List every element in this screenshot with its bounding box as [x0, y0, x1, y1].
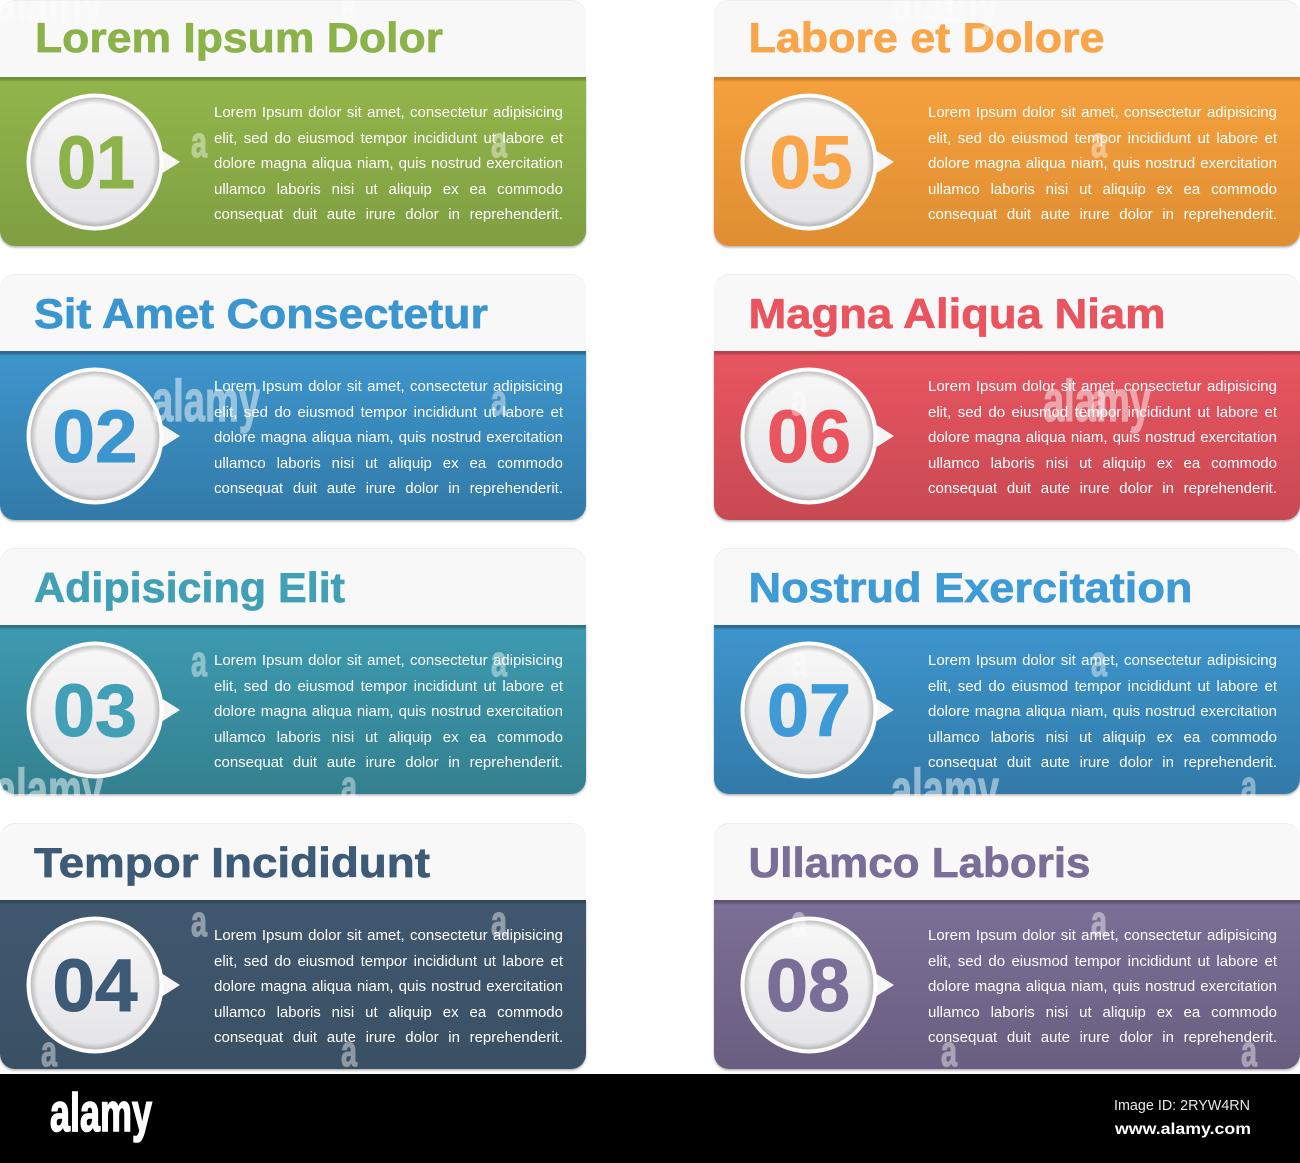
footer bar: [0, 1074, 1300, 1163]
text block: [928, 927, 1277, 1046]
band: orange body: [714, 77, 1300, 246]
text block: Lorem Ipsum dolor sit amet, consectetur adipisicing: [214, 927, 563, 944]
text block: elit, sed do eiusmod tempor incididunt ut labore et: [214, 404, 563, 420]
text block: elit, sed do eiusmod tempor incididunt ut labore et: [214, 952, 563, 970]
text block: ullamco laboris nisi ut aliquip ex ea commodo: [214, 1004, 563, 1020]
heading: Magna Aliqua Niam: [714, 274, 1300, 351]
text block: consequat duit aute irure dolor in reprehenderit.: [214, 206, 563, 223]
band: red body: [714, 351, 1300, 520]
heading: Ullamco Laboris: Ullamco Laboris: [748, 839, 1090, 886]
text block: Lorem Ipsum dolor sit amet, consectetur adipisicing: [214, 104, 563, 121]
text block: [928, 652, 1277, 771]
text block: consequat duit aute irure dolor in reprehenderit.: [214, 754, 563, 771]
badge: number 07: [740, 642, 894, 778]
text block: [214, 104, 563, 223]
text block: consequat duit aute irure dolor in reprehenderit.: [928, 754, 1277, 771]
text block: elit, sed do eiusmod tempor incididunt ut labore et: [928, 678, 1277, 694]
heading: Tempor Incididunt: Tempor Incididunt: [34, 839, 430, 886]
badge: number 05: [740, 94, 894, 230]
band: blue body: [0, 351, 586, 520]
watermarks overlay: a: [791, 376, 807, 425]
text block: ullamco laboris nisi ut aliquip ex ea commodo: [928, 454, 1277, 472]
text block: ullamco laboris nisi ut aliquip ex ea commodo: [928, 728, 1277, 746]
badge: number 07: 07: [767, 669, 851, 752]
text block: dolore magna aliqua niam, quis nostrud exercitation: [214, 429, 563, 446]
text block: dolore magna aliqua niam, quis nostrud exercitation: [928, 155, 1277, 172]
panel: card 04: [0, 823, 588, 1072]
heading: Labore et Dolore: Labore et Dolore: [748, 14, 1104, 61]
band: navy body: [0, 900, 586, 1069]
watermarks overlay: alamy: [152, 369, 260, 434]
band: purple body: [714, 900, 1300, 1069]
text block: elit, sed do eiusmod tempor incididunt ut labore et: [214, 130, 563, 146]
badge: number 01: [26, 94, 180, 230]
text block: ullamco laboris nisi ut aliquip ex ea commodo: [928, 180, 1277, 198]
watermarks overlay: a: [191, 637, 207, 686]
text block: dolore magna aliqua niam, quis nostrud exercitation: [214, 978, 563, 995]
heading: Sit Amet Consectetur: Sit Amet Consectetur: [34, 290, 488, 337]
panel: card 03: [0, 548, 588, 797]
panel: card 07: [712, 548, 1300, 797]
watermarks overlay: a: [491, 376, 507, 425]
watermarks overlay: a: [191, 897, 207, 946]
logo: alamy: alamy: [50, 1083, 152, 1143]
text block: ullamco laboris nisi ut aliquip ex ea commodo: [214, 180, 563, 198]
badge: number 04: [26, 916, 180, 1054]
heading: Sit Amet Consectetur: [0, 274, 586, 351]
badge: number 01: 01: [57, 121, 135, 204]
watermarks overlay: a: [1091, 637, 1107, 686]
watermarks overlay: a: [791, 637, 807, 686]
text block: dolore magna aliqua niam, quis nostrud exercitation: [928, 703, 1277, 720]
image id: Image ID: 2RYW4RN: [1114, 1097, 1250, 1114]
text block: elit, sed do eiusmod tempor incididunt ut labore et: [928, 130, 1277, 146]
text block: dolore magna aliqua niam, quis nostrud exercitation: [928, 978, 1277, 995]
badge: number 02: 02: [52, 395, 138, 478]
panel: card 01: [0, 0, 588, 249]
text block: dolore magna aliqua niam, quis nostrud exercitation: [928, 429, 1277, 446]
text block: Lorem Ipsum dolor sit amet, consectetur adipisicing: [928, 378, 1277, 395]
band: teal body: [0, 625, 586, 794]
text block: ullamco laboris nisi ut aliquip ex ea commodo: [928, 1004, 1277, 1020]
watermarks overlay: a: [1241, 762, 1257, 811]
badge: number 02: [26, 368, 180, 504]
text block: consequat duit aute irure dolor in reprehenderit.: [214, 480, 563, 497]
text block: consequat duit aute irure dolor in reprehenderit.: [928, 1029, 1277, 1046]
watermarks overlay: a: [1091, 118, 1107, 167]
panel: card 06: [712, 274, 1300, 523]
badge: number 04: 04: [52, 944, 138, 1027]
badge: number 03: 03: [53, 669, 137, 752]
watermarks overlay: a: [1091, 897, 1107, 946]
band: blue body: [714, 625, 1300, 794]
watermarks overlay: a: [191, 118, 207, 167]
heading: Nostrud Exercitation: [714, 548, 1300, 625]
watermarks overlay: a: [491, 897, 507, 946]
panel: card 05: [712, 0, 1300, 249]
text block: Lorem Ipsum dolor sit amet, consectetur adipisicing: [928, 104, 1277, 121]
band: green body: [0, 77, 586, 246]
text block: Lorem Ipsum dolor sit amet, consectetur adipisicing: [214, 378, 563, 395]
text block: dolore magna aliqua niam, quis nostrud exercitation: [214, 155, 563, 172]
website: www.alamy.com: [1114, 1121, 1251, 1138]
watermarks overlay: a: [491, 637, 507, 686]
watermarks overlay: alamy: [891, 758, 999, 823]
watermarks overlay: a: [791, 897, 807, 946]
text block: [214, 652, 563, 771]
text block: [928, 378, 1277, 497]
watermarks overlay: a: [491, 118, 507, 167]
text block: Lorem Ipsum dolor sit amet, consectetur adipisicing: [214, 652, 563, 669]
text block: elit, sed do eiusmod tempor incididunt ut labore et: [928, 404, 1277, 420]
heading: Ullamco Laboris: [714, 823, 1300, 900]
text block: consequat duit aute irure dolor in reprehenderit.: [214, 1029, 563, 1046]
watermarks overlay: alamy: [1043, 369, 1151, 434]
badge: number 05: 05: [770, 121, 852, 204]
text block: elit, sed do eiusmod tempor incididunt ut labore et: [928, 952, 1277, 970]
heading: Lorem Ipsum Dolor: Lorem Ipsum Dolor: [35, 14, 443, 61]
text block: Lorem Ipsum dolor sit amet, consectetur adipisicing: [928, 652, 1277, 669]
watermarks overlay: a: [1091, 376, 1107, 425]
text block: [214, 927, 563, 1046]
panel: card 08: [712, 823, 1300, 1072]
text block: dolore magna aliqua niam, quis nostrud exercitation: [214, 703, 563, 720]
panel: card 02: [0, 274, 588, 523]
heading: Labore et Dolore: [714, 0, 1300, 77]
text block: consequat duit aute irure dolor in reprehenderit.: [928, 206, 1277, 223]
heading: Adipisicing Elit: [0, 548, 586, 625]
watermarks overlay: a: [341, 762, 357, 811]
heading: Nostrud Exercitation: Nostrud Exercitation: [748, 564, 1192, 611]
badge: number 06: 06: [767, 395, 851, 478]
heading: Magna Aliqua Niam: Magna Aliqua Niam: [748, 290, 1165, 337]
badge: number 06: [740, 368, 894, 504]
badge: number 08: [740, 916, 894, 1054]
badge: number 03: [26, 642, 180, 778]
badge: number 08: 08: [766, 944, 850, 1027]
heading: Tempor Incididunt: [0, 823, 586, 900]
text block: [928, 104, 1277, 223]
text block: elit, sed do eiusmod tempor incididunt ut labore et: [214, 678, 563, 694]
text block: consequat duit aute irure dolor in reprehenderit.: [928, 480, 1277, 497]
text block: ullamco laboris nisi ut aliquip ex ea commodo: [214, 728, 563, 746]
text block: ullamco laboris nisi ut aliquip ex ea commodo: [214, 454, 563, 472]
heading: Adipisicing Elit: Adipisicing Elit: [34, 564, 345, 611]
heading: Lorem Ipsum Dolor: [0, 0, 586, 77]
text block: [214, 378, 563, 497]
text block: Lorem Ipsum dolor sit amet, consectetur adipisicing: [928, 927, 1277, 944]
